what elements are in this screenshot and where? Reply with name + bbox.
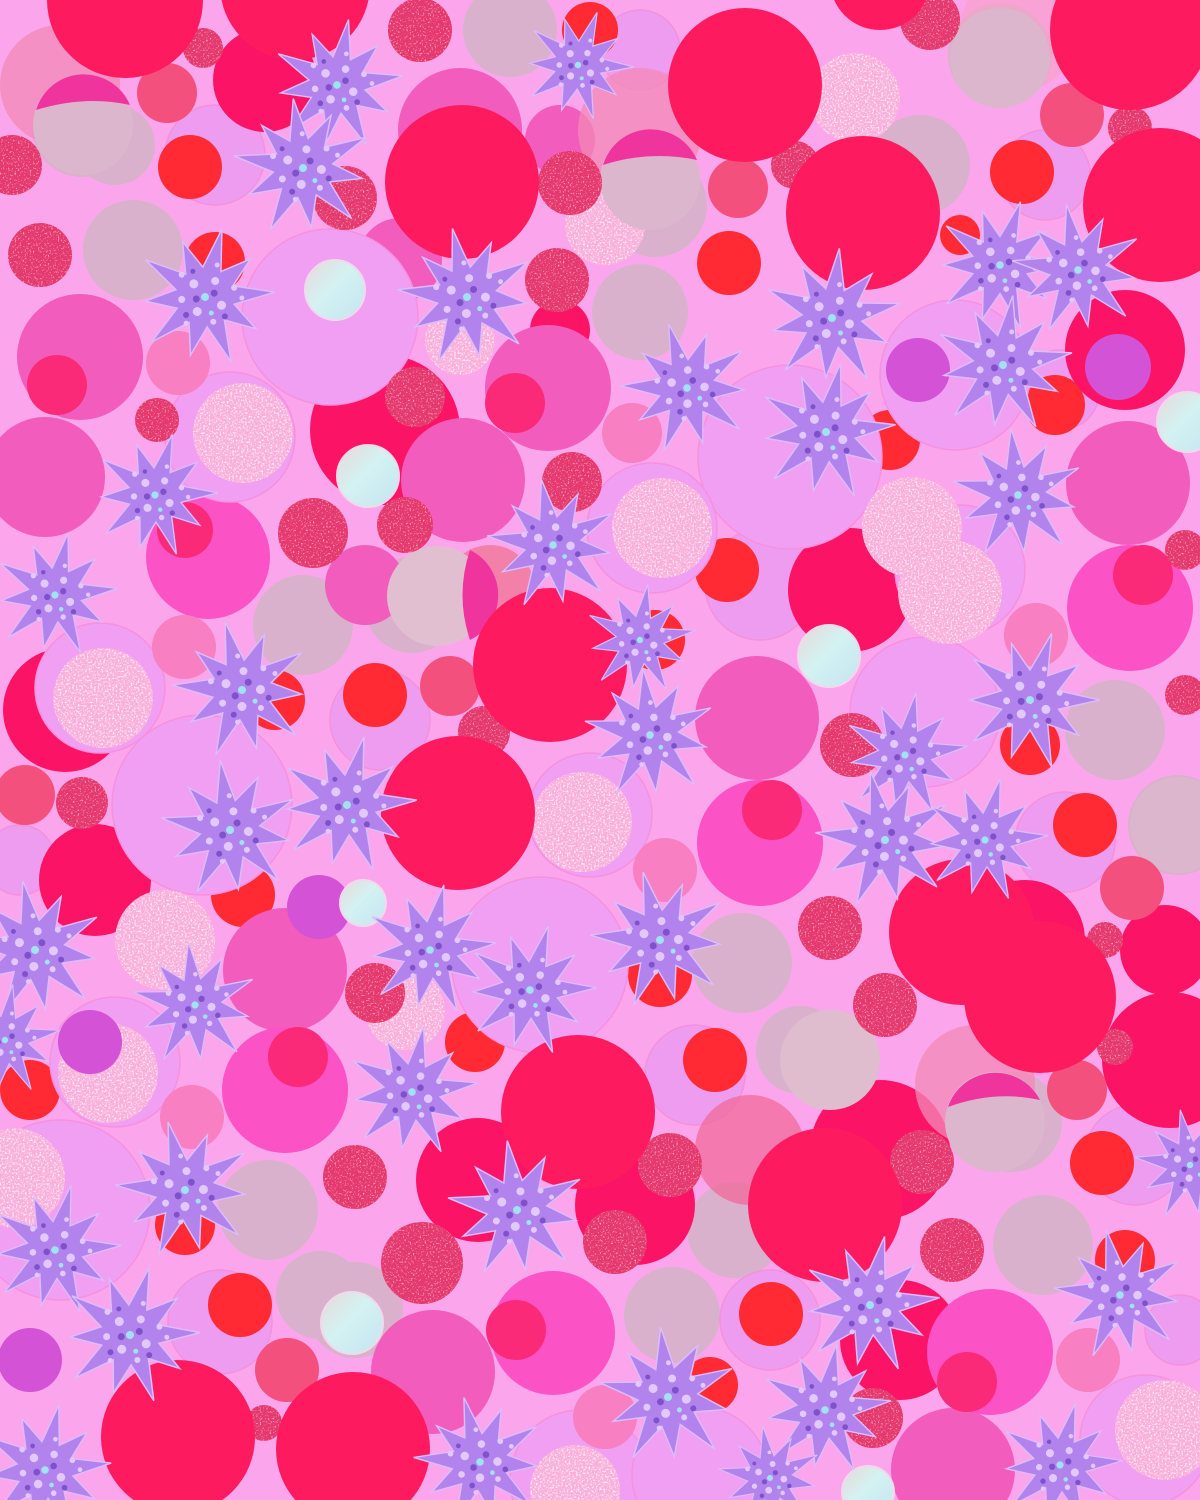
layer: crepe spots <box>27 355 1173 1412</box>
layer: purple discs <box>0 334 1151 1392</box>
layer: magenta crepe discs <box>146 495 1193 1415</box>
layer: iridescent silver discs <box>305 260 1200 1500</box>
layer: small pink discs <box>146 331 1120 1449</box>
layer: clear sequin pink caps <box>36 74 1040 1107</box>
